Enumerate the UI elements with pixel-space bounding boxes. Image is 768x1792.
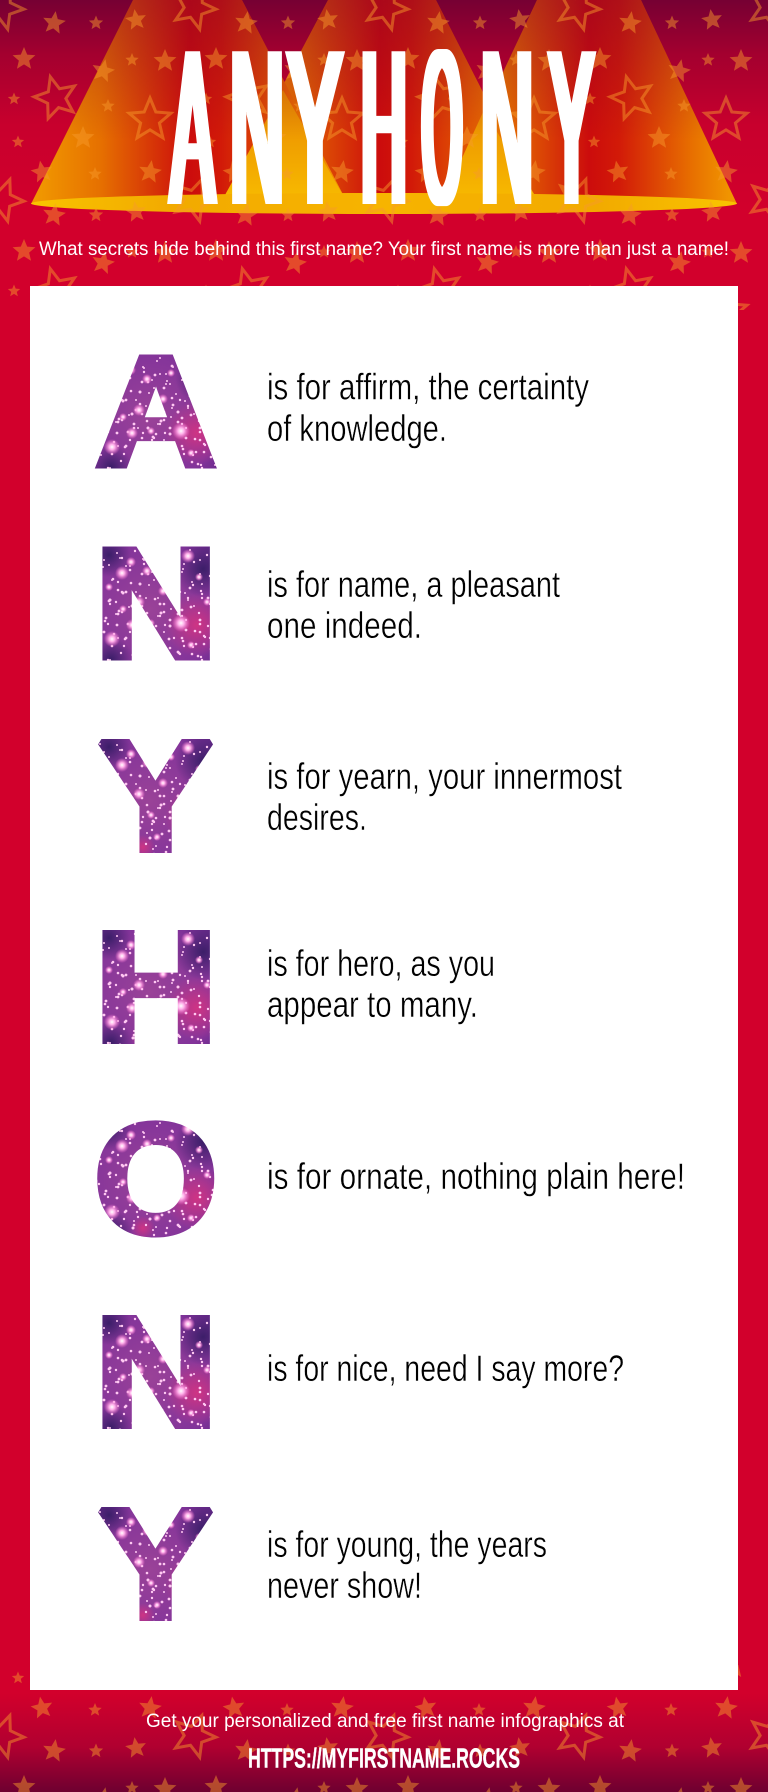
row: H <box>95 900 495 1074</box>
text: A line: of knowledge. <box>267 408 447 449</box>
row: N 2 <box>95 1284 624 1458</box>
title: Y <box>287 4 343 252</box>
subtitle: What secrets hide behind this first name? Your first name is more than just a name! <box>39 239 729 260</box>
title: N <box>481 4 533 252</box>
spotlight: left <box>31 0 348 204</box>
text: Y line: never show! <box>267 1565 422 1606</box>
text: H line <box>267 943 495 1025</box>
text: A line <box>267 366 589 449</box>
letter A: A <box>96 324 216 498</box>
row: O <box>94 1092 685 1266</box>
spotlights <box>31 0 737 214</box>
star pattern: bottom <box>0 1665 768 1792</box>
row: A <box>96 324 589 498</box>
text: Y line: is for young, the years <box>267 1524 547 1565</box>
title <box>171 4 594 252</box>
letter H: H <box>95 900 217 1074</box>
row: Y 2 <box>98 1476 547 1650</box>
text: H line: is for hero, as you <box>267 943 495 984</box>
cone shading <box>31 0 737 204</box>
letter Y: Y <box>98 708 212 882</box>
overlap glow: right <box>441 110 540 204</box>
row: N <box>95 516 561 690</box>
title: O <box>422 4 462 252</box>
text: Y <box>549 4 594 252</box>
title: N <box>230 4 284 252</box>
text: N line: one indeed. <box>267 605 422 646</box>
letter N: N <box>95 516 217 690</box>
letter Y: Y <box>98 1476 212 1650</box>
text: Y line: is for yearn, your innermost <box>267 756 623 797</box>
text: H line: appear to many. <box>267 984 478 1025</box>
footer url: HTTPS://MYFIRSTNAME.ROCKS <box>248 1742 520 1774</box>
text: Y line <box>267 756 623 838</box>
overlap glow: left <box>220 90 348 204</box>
star pattern: top <box>0 0 768 310</box>
stage light pool <box>31 193 737 214</box>
text: A line: is for affirm, the certainty <box>267 366 589 408</box>
text: N line <box>267 564 561 646</box>
text: N line: is for nice, need I say more? <box>267 1348 624 1389</box>
row: Y <box>98 708 623 882</box>
letter N: N <box>95 1284 217 1458</box>
text: Y line <box>267 1524 547 1606</box>
text: N line: is for name, a pleasant <box>267 564 561 605</box>
title: H <box>361 4 406 252</box>
text: Y line: desires. <box>267 797 367 838</box>
spotlight: right <box>441 0 737 204</box>
title: A <box>171 4 214 252</box>
footer text: Get your personalized and free first name infographics at <box>146 1711 625 1732</box>
spotlight: middle <box>220 0 540 204</box>
letter O: O <box>94 1092 217 1266</box>
panel: white card <box>30 286 738 1690</box>
